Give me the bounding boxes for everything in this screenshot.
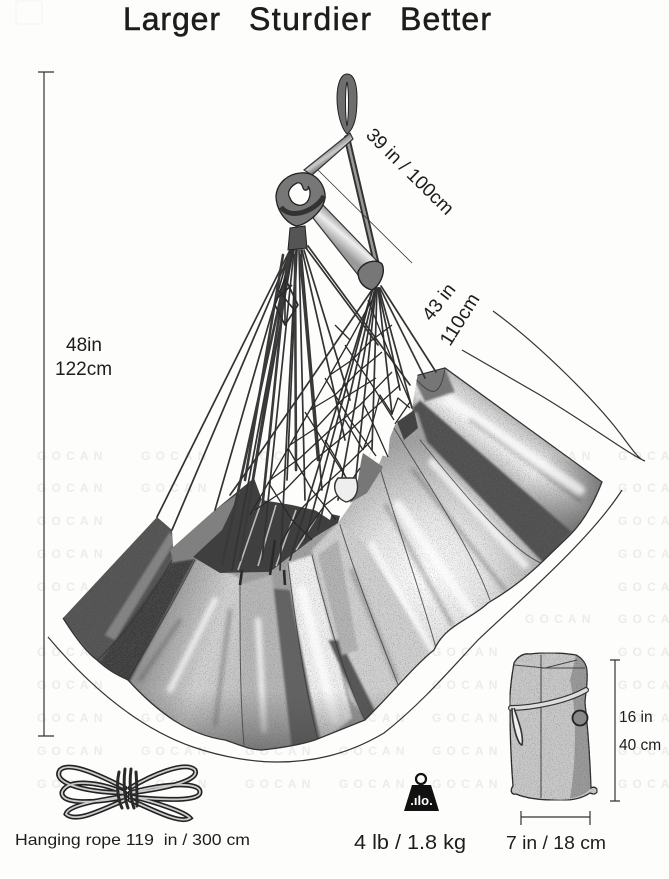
watermark pattern: GOCAN xyxy=(141,777,212,791)
watermark pattern xyxy=(37,449,669,791)
seat depth label: 110cm xyxy=(436,290,484,350)
bar end knot xyxy=(358,261,383,290)
watermark pattern: GOCAN xyxy=(37,547,108,561)
band: dark centre xyxy=(272,588,320,745)
watermark pattern: GOCAN xyxy=(37,514,108,528)
band: speckled mid xyxy=(238,575,292,752)
watermark pattern: GOCAN xyxy=(141,744,212,758)
watermark pattern: GOCAN xyxy=(37,744,108,758)
ring xyxy=(276,173,325,226)
seat depth curve xyxy=(462,311,645,461)
watermark pattern: GOCAN xyxy=(432,711,503,725)
watermark pattern: GOCAN xyxy=(37,481,108,495)
cords: heavy central strands xyxy=(222,255,318,565)
bag width dimension line xyxy=(521,811,590,825)
watermark pattern: GOCAN xyxy=(432,645,503,659)
hook arm xyxy=(304,133,353,175)
fabric seat xyxy=(63,368,602,750)
cord ends xyxy=(240,540,285,585)
band: end panel xyxy=(60,515,176,665)
weight label: 4 lb / 1.8 kg xyxy=(354,832,466,854)
seat inner flap xyxy=(170,492,240,562)
watermark pattern: GOCAN xyxy=(37,580,108,594)
hammock chair illustration xyxy=(50,74,620,760)
height dimension line xyxy=(38,72,54,736)
net tip loop xyxy=(335,478,358,502)
spreader bar xyxy=(313,205,378,280)
bag button xyxy=(572,710,588,726)
title: Better xyxy=(400,1,491,37)
top knot xyxy=(288,226,307,250)
watermark pattern: GOCAN xyxy=(432,744,503,758)
cords: left fan xyxy=(157,246,410,570)
band: light front xyxy=(288,555,352,742)
ring shadow xyxy=(281,196,324,213)
watermark pattern: GOCAN xyxy=(141,481,212,495)
band: dark left xyxy=(95,558,196,685)
top loop xyxy=(337,74,357,134)
band: light left xyxy=(128,558,242,752)
watermark pattern: GOCAN xyxy=(525,612,596,626)
watermark pattern: GOCAN xyxy=(432,777,503,791)
band: thin dark xyxy=(328,640,376,722)
seat depth label: 43 in xyxy=(418,280,460,325)
seat light cord gaps xyxy=(238,500,316,570)
dark notch at fabric edge xyxy=(397,410,418,440)
icon: weight xyxy=(404,774,439,811)
fabric outline xyxy=(63,368,602,750)
band: mid grey centre xyxy=(311,524,427,710)
watermark pattern: GOCAN xyxy=(245,744,316,758)
watermark pattern: GOCAN xyxy=(525,481,596,495)
watermark pattern: GOCAN xyxy=(37,449,108,463)
watermark pattern: GOCAN xyxy=(245,449,316,463)
bag height label: 16 in xyxy=(619,709,653,726)
inner dark seat xyxy=(170,478,340,573)
fabric highlights and folds xyxy=(140,400,580,730)
title xyxy=(123,1,491,37)
seat depth label xyxy=(418,280,484,350)
watermark pattern: GOCAN xyxy=(339,711,410,725)
bag strap xyxy=(511,690,586,708)
seat length curve xyxy=(48,490,622,762)
hanging rope xyxy=(347,138,376,262)
faint logo mark xyxy=(16,1,42,24)
title: Sturdier xyxy=(249,1,371,37)
watermark pattern: GOCAN xyxy=(339,744,410,758)
net: white panels xyxy=(262,350,418,520)
watermark pattern: GOCAN xyxy=(37,711,108,725)
height label: 122cm xyxy=(55,359,112,380)
watermark pattern: GOCAN xyxy=(339,449,410,463)
watermark pattern: GOCAN xyxy=(245,777,316,791)
icon: weight: .ılo. xyxy=(410,793,433,808)
bag strap loop xyxy=(512,708,522,745)
bag side shading xyxy=(570,655,591,798)
net fringe petals xyxy=(325,395,410,497)
cords: right fan xyxy=(230,286,436,560)
band: right dark xyxy=(412,400,572,567)
watermark pattern: GOCAN xyxy=(141,449,212,463)
watermark pattern: GOCAN xyxy=(432,678,503,692)
icon: coiled hanging rope xyxy=(59,767,200,820)
fold lines xyxy=(97,368,541,745)
band: top right light xyxy=(412,369,601,528)
grey wedge at net foot xyxy=(350,453,383,503)
net lattice xyxy=(250,300,410,545)
watermark pattern: GOCAN xyxy=(339,777,410,791)
title: Larger xyxy=(123,1,220,37)
bag width label: 7 in / 18 cm xyxy=(506,832,606,853)
bag height label: 40 cm xyxy=(619,737,661,754)
height label: 48in xyxy=(66,335,102,356)
watermark pattern: GOCAN xyxy=(37,645,108,659)
chair width label: 39 in / 100cm xyxy=(361,125,458,220)
watermark pattern: GOCAN xyxy=(141,711,212,725)
bag height dimension line xyxy=(610,660,620,801)
rope length label: Hanging rope 119 in / 300 cm xyxy=(15,832,250,849)
icon: packed carry bag xyxy=(510,653,597,800)
chair width dimension line xyxy=(318,170,412,263)
watermark pattern: GOCAN xyxy=(37,678,108,692)
watermark pattern: GOCAN xyxy=(525,449,596,463)
watermark pattern: GOCAN xyxy=(37,777,108,791)
band: top corner shade xyxy=(412,368,455,402)
band: broad light xyxy=(338,411,542,652)
bag seams xyxy=(514,655,585,798)
left knot net xyxy=(275,278,298,325)
